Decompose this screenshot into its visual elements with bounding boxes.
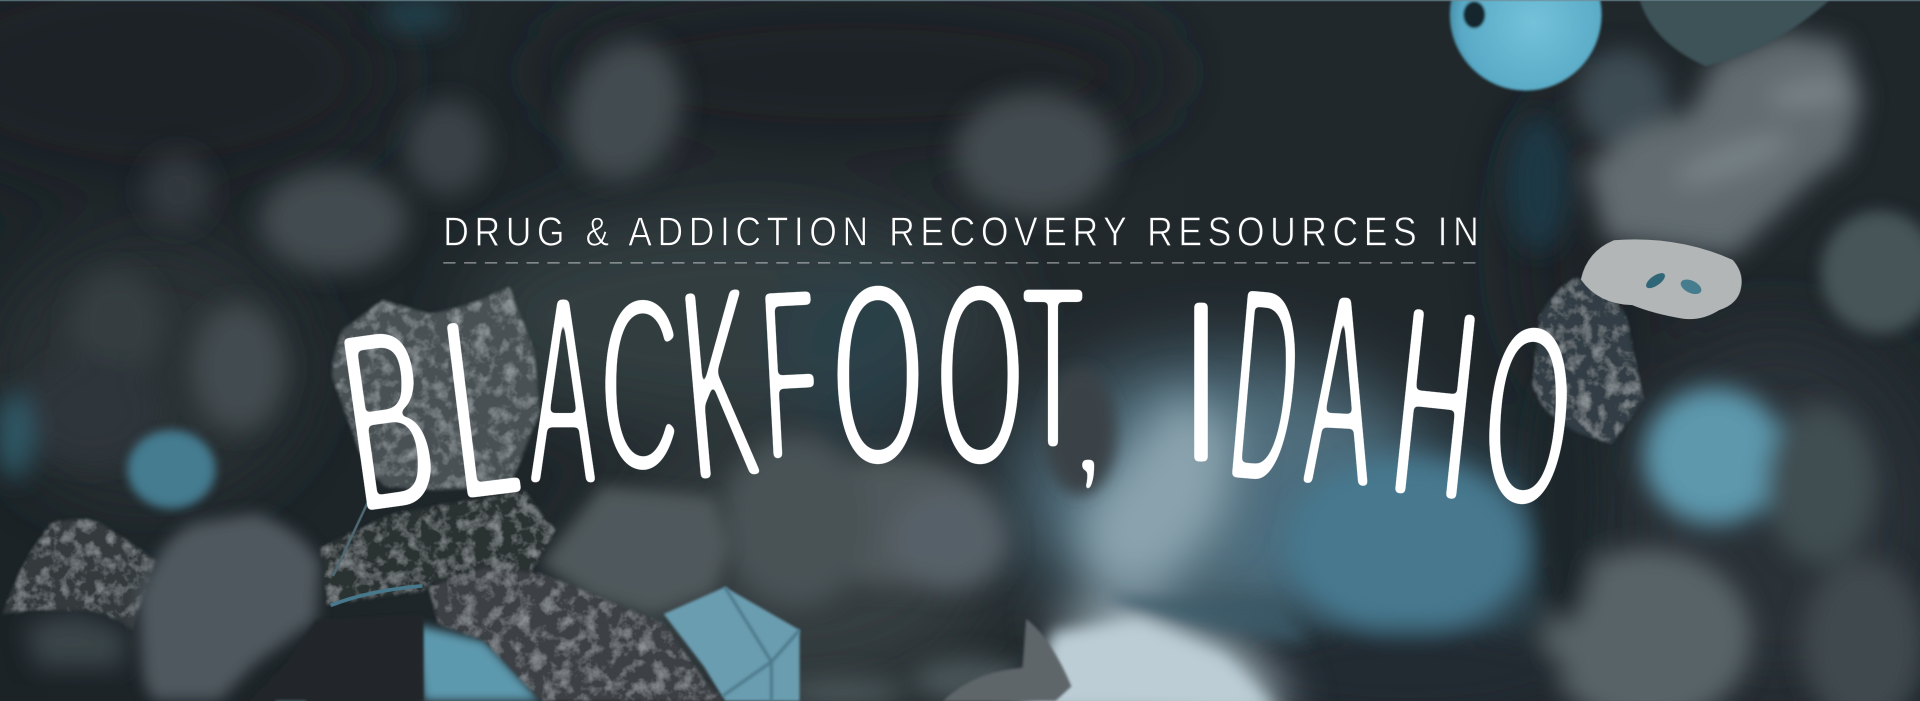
title: Blackfoot, Idaho: O [832,229,924,520]
title: Blackfoot, Idaho: C [600,246,680,523]
title: Blackfoot, Idaho: A [1299,233,1382,549]
small gray leaves bottom centre [943,619,1071,701]
dashed divider [443,262,1477,264]
title: Blackfoot, Idaho: I [1182,248,1220,515]
dark textured leaf right [1533,277,1643,444]
top edge line [0,0,1920,1]
blurred right leaf [1821,211,1920,333]
title: Blackfoot, Idaho: O [1473,269,1583,564]
title: Blackfoot, Idaho: H [1379,245,1491,562]
title: Blackfoot, Idaho: T [1022,235,1084,500]
pale leaf [1581,239,1742,319]
title: Blackfoot, Idaho: K [671,225,769,542]
title: Blackfoot, Idaho: O [936,231,1024,520]
bottom left foliage [2,487,800,701]
title: Blackfoot, Idaho: F [755,235,825,515]
title: Blackfoot, Idaho: L [429,258,533,558]
title: Blackfoot, Idaho: B [325,270,451,570]
icon: blue berry [1450,0,1602,91]
sharp leaf behind title [332,287,540,490]
blurred teal leaf left [127,430,216,509]
title: Blackfoot, Idaho: A [530,237,597,544]
title: Blackfoot, Idaho: D [1219,228,1311,545]
dark leaf top right [1640,0,1829,66]
subtitle: DRUG & ADDICTION RECOVERY RESOURCES IN [443,211,1479,255]
title: Blackfoot, Idaho: , [1071,337,1105,505]
